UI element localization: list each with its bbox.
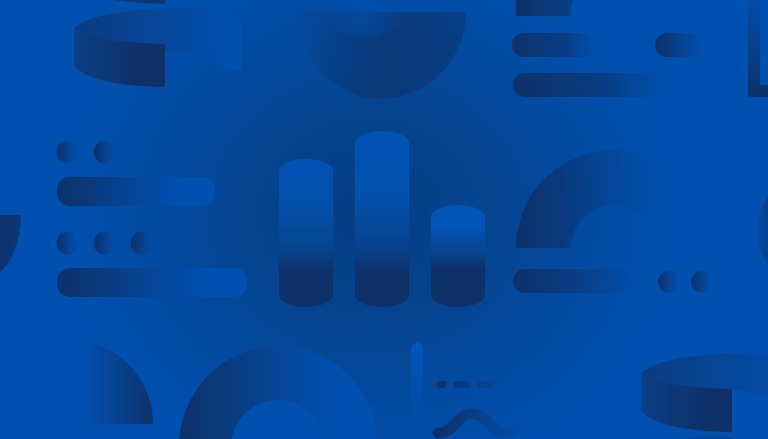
donut: bottom centre (179, 346, 378, 439)
L-shaped frame: top right (748, 0, 768, 97)
bar (57, 177, 215, 206)
vertical pill: bottom centre (411, 343, 423, 439)
left-edge arc (0, 215, 21, 272)
donut ring (179, 346, 378, 439)
top-left sliver (114, 0, 165, 4)
ring front wall (74, 29, 165, 87)
legend dots and bars: left, lower (56, 232, 247, 297)
legend dots and bars: left, upper (56, 140, 215, 206)
quarter disc: bottom left (83, 341, 153, 424)
ring front wall (641, 374, 732, 432)
cylinder 1 (279, 159, 333, 307)
cylinder 3 (431, 205, 485, 307)
arc block: top right (516, 0, 573, 16)
dot (94, 232, 116, 254)
arch: right centre (516, 150, 712, 248)
dot (94, 140, 116, 164)
short pill (512, 33, 596, 57)
dot (658, 271, 680, 293)
donut hole (231, 400, 325, 439)
long pill (513, 73, 665, 97)
ring top surface (74, 8, 242, 71)
pill and dots: right centre (513, 269, 713, 293)
dash (453, 381, 471, 388)
pill (513, 269, 630, 293)
soft glow at top centre (320, 0, 410, 37)
wave line (438, 414, 526, 433)
3D ring: top left (74, 8, 242, 87)
bar (57, 268, 247, 297)
bottom-right sliver (684, 437, 733, 439)
dashed line (436, 381, 520, 388)
dash (477, 381, 495, 388)
pills: top right group (512, 33, 702, 97)
cylinder 2 (355, 131, 409, 307)
bar chart: three cylinders (279, 131, 485, 307)
dot (130, 232, 154, 254)
3D ring: bottom right (641, 353, 768, 432)
dot (56, 232, 80, 254)
dash (436, 381, 447, 388)
dot (691, 271, 713, 293)
dot (56, 140, 80, 164)
tiny pill (655, 33, 702, 57)
right-edge arc (757, 195, 768, 265)
ring top surface (641, 353, 768, 396)
half disc: top centre (290, 12, 466, 99)
dash (500, 381, 520, 388)
